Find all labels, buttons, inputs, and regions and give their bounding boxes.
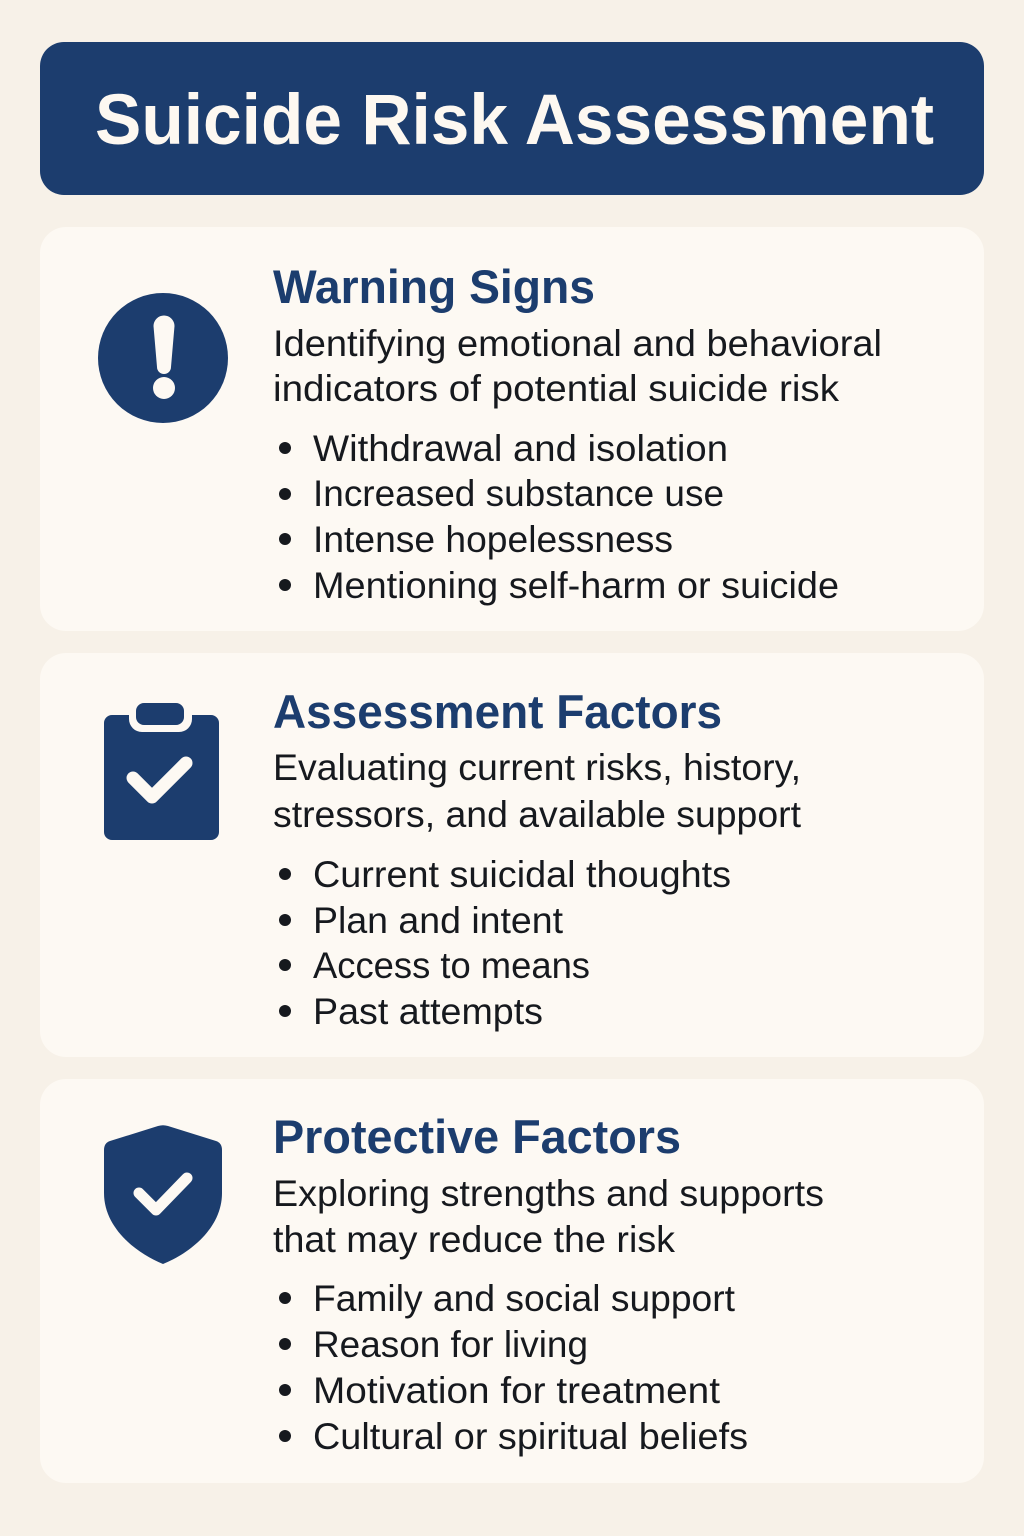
panel: protective factors xyxy=(40,1079,984,1483)
icon: shield with check xyxy=(104,1125,222,1264)
icon: exclamation circle xyxy=(98,293,228,423)
panel: assessment factors xyxy=(40,653,984,1057)
list: protective factors xyxy=(279,1278,748,1457)
heading: warning signs: Warning Signs xyxy=(273,260,595,313)
title: Suicide Risk Assessment xyxy=(95,81,934,160)
description: assessment factors: Evaluating current risks, history, xyxy=(273,747,801,788)
panel: warning signs xyxy=(40,227,984,631)
list: assessment factors: Plan and intent xyxy=(313,900,564,941)
description: assessment factors xyxy=(273,747,802,835)
list: protective factors: Reason for living xyxy=(313,1324,588,1365)
description: warning signs: indicators of potential suicide risk xyxy=(273,368,840,409)
list: assessment factors: Access to means xyxy=(313,945,590,986)
title banner xyxy=(40,42,984,195)
description: warning signs: Identifying emotional and behavioral xyxy=(273,323,882,364)
description: assessment factors: stressors, and available support xyxy=(273,794,802,835)
icon: clipboard with check xyxy=(104,703,219,840)
description: protective factors xyxy=(273,1173,824,1260)
description: protective factors: that may reduce the risk xyxy=(273,1219,676,1260)
list: protective factors: Motivation for treatment xyxy=(313,1370,721,1411)
list: warning signs: Mentioning self-harm or suicide xyxy=(313,565,839,606)
list: warning signs xyxy=(279,428,839,606)
heading: assessment factors: Assessment Factors xyxy=(273,685,722,738)
description: warning signs xyxy=(273,323,882,409)
list: warning signs: Increased substance use xyxy=(313,473,724,514)
list: protective factors: Cultural or spiritual beliefs xyxy=(313,1416,748,1457)
list: warning signs: Intense hopelessness xyxy=(313,519,673,560)
description: protective factors: Exploring strengths and supports xyxy=(273,1173,824,1214)
list: assessment factors: Current suicidal thoughts xyxy=(313,854,731,895)
heading: protective factors: Protective Factors xyxy=(273,1110,681,1163)
list: warning signs: Withdrawal and isolation xyxy=(313,428,728,469)
list: protective factors: Family and social support xyxy=(313,1278,736,1319)
list: assessment factors xyxy=(279,854,731,1032)
list: assessment factors: Past attempts xyxy=(313,991,543,1032)
